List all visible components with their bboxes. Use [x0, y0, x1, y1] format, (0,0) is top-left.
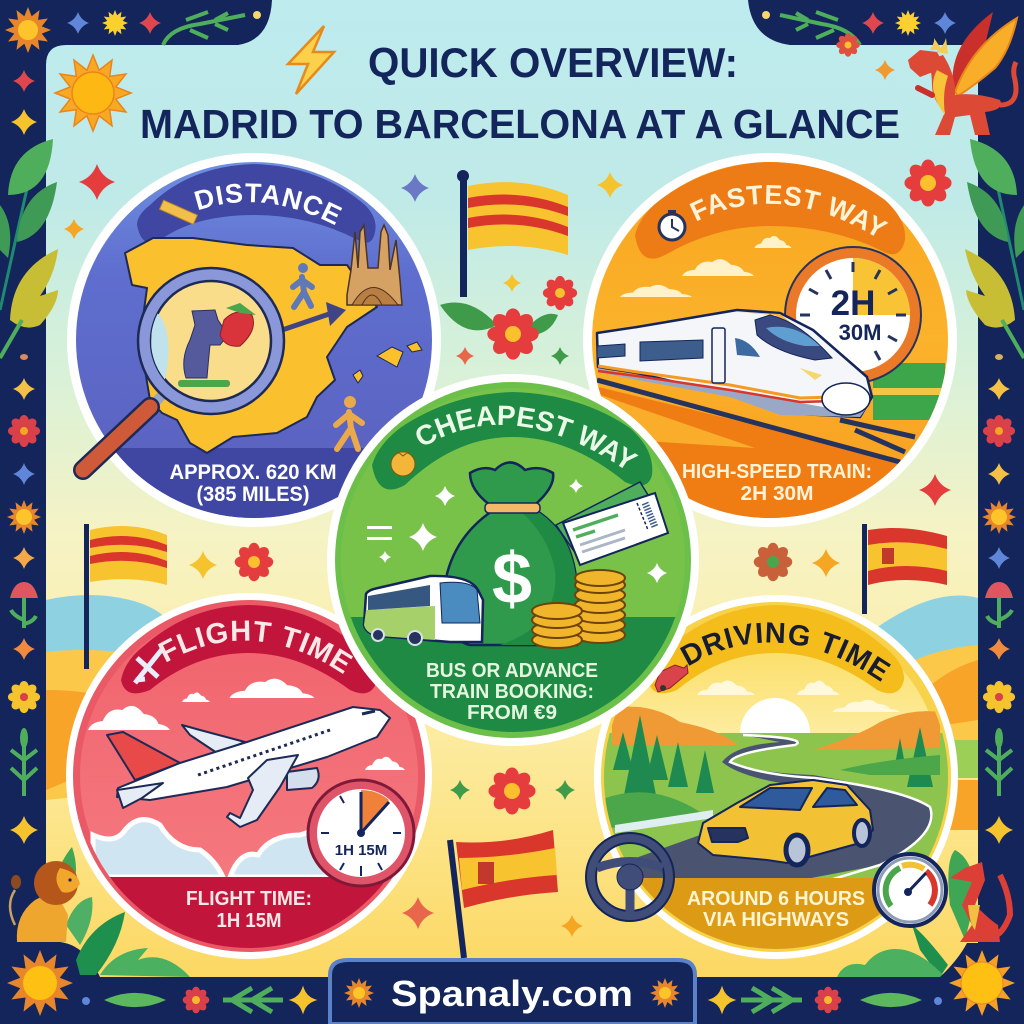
text: distance value: APPROX. 620 KM	[170, 461, 336, 484]
icon: lightning bolt	[288, 26, 334, 94]
text: fastest way value: 2H 30M	[740, 483, 814, 505]
text: cheapest way value: TRAIN BOOKING:	[430, 681, 594, 703]
text: cheapest way value: FROM €9	[467, 702, 557, 724]
heading band: driving time	[648, 605, 904, 693]
clouds	[697, 680, 900, 712]
ground band	[350, 617, 676, 732]
icon: sun bottom-right	[949, 950, 1015, 1016]
icon: small plane	[135, 648, 163, 683]
text: fastest way value	[682, 461, 872, 505]
icon: walking person bottom	[336, 396, 362, 449]
border ornaments: left column	[7, 354, 41, 844]
icon: small money bag	[391, 452, 415, 476]
icon: dragon bottom-right	[950, 862, 1010, 942]
icon: clock 2h 30m	[785, 247, 921, 383]
sparkles	[367, 479, 667, 583]
panel: distance	[67, 153, 441, 527]
icon: bus	[364, 576, 483, 645]
flowers between panels	[235, 159, 952, 815]
heading band: cheapest way: CHEAPEST WAY	[416, 406, 638, 468]
icon: coin stacks	[532, 570, 625, 648]
heading band: flight time	[121, 605, 376, 694]
icon: stopwatch	[659, 210, 685, 240]
bear and strawberry tree	[150, 303, 256, 390]
train	[597, 310, 872, 417]
text: flight time value	[186, 888, 312, 932]
bottom clouds and band	[90, 817, 384, 948]
title: MADRID TO BARCELONA AT A GLANCE	[140, 101, 900, 147]
icon: footer sun right	[650, 978, 680, 1008]
icon: clock 1h 15m	[308, 780, 414, 886]
landscape and road	[600, 698, 952, 968]
icon: sun top-left	[55, 55, 131, 131]
sparkles between panels	[64, 60, 951, 937]
text: driving time value: AROUND 6 HOURS	[687, 888, 865, 910]
icon: ticket	[556, 482, 668, 565]
map of Spain	[125, 238, 377, 453]
border ornaments: right column	[982, 354, 1016, 844]
panel: cheapest way	[327, 374, 699, 746]
panel: fastest way	[583, 153, 957, 527]
foliage bottom-right	[837, 850, 975, 977]
airplane	[107, 707, 390, 827]
flag: Catalonia left	[84, 524, 167, 669]
icon: magnifying glass	[83, 268, 284, 470]
flag: Spain right	[862, 524, 947, 614]
icon: small car	[655, 665, 688, 692]
icon: speedometer	[874, 854, 946, 926]
icon: steering wheel	[591, 838, 669, 916]
car	[698, 780, 873, 865]
landscape and track	[590, 363, 945, 530]
panel: flight time	[66, 593, 432, 959]
heading band: distance	[137, 164, 376, 242]
flag: Catalonia top	[457, 170, 568, 297]
footer banner: Spanaly.com	[391, 973, 633, 1014]
islands	[353, 342, 422, 383]
footer banner	[330, 960, 695, 1024]
clouds	[620, 236, 792, 297]
heading band: flight time: FLIGHT TIME	[158, 620, 353, 674]
flower decoration top	[440, 276, 577, 360]
foliage left border	[0, 139, 58, 358]
text: flight time value: 1H 15M	[216, 910, 282, 932]
border ornaments: bottom row	[82, 987, 942, 1013]
icon: footer sun left	[344, 978, 374, 1008]
foliage bottom-left	[57, 847, 190, 977]
heading band: cheapest way	[372, 392, 652, 490]
title: QUICK OVERVIEW:	[368, 39, 738, 86]
icon: clock 1h 15m: 1H 15M	[335, 842, 387, 859]
panel: driving time	[585, 595, 958, 959]
text: driving time value	[687, 888, 865, 931]
text: flight time value: FLIGHT TIME:	[186, 888, 312, 910]
text: cheapest way value: BUS OR ADVANCE	[426, 660, 598, 682]
text: driving time heading: DRIVING TIME	[680, 622, 891, 682]
icon: money bag: $	[492, 539, 532, 619]
foliage right border	[965, 139, 1024, 358]
icon: clock 2h 30m: 2H	[831, 284, 875, 323]
icon: dragon top-right	[908, 12, 1017, 135]
heading band: fastest way: FASTEST WAY	[690, 185, 888, 236]
heading band: distance: DISTANCE	[194, 183, 342, 225]
bottom band: distance	[116, 448, 364, 518]
icon: money bag	[444, 462, 578, 645]
landscape hills	[46, 595, 978, 830]
text: cheapest way value	[426, 660, 598, 724]
border ornaments: top	[5, 7, 956, 135]
heading band: fastest way	[635, 162, 906, 259]
text: distance value: (385 MILES)	[196, 483, 310, 506]
arrow: route	[253, 302, 346, 340]
text: distance value	[170, 461, 336, 506]
icon: lion	[10, 861, 80, 942]
icon: Sagrada Familia	[347, 225, 402, 305]
clouds	[88, 679, 405, 770]
text: driving time value: VIA HIGHWAYS	[703, 909, 849, 931]
navy corner bottom-right	[940, 943, 978, 977]
text: fastest way value: HIGH-SPEED TRAIN:	[682, 461, 872, 483]
icon: clock 2h 30m: 30M	[839, 320, 881, 345]
icon: sun bottom-left	[7, 950, 73, 1016]
icon: walking person top	[293, 263, 312, 307]
icon: ruler	[160, 200, 197, 224]
flag: Spain bottom	[450, 830, 558, 958]
title	[140, 26, 900, 147]
